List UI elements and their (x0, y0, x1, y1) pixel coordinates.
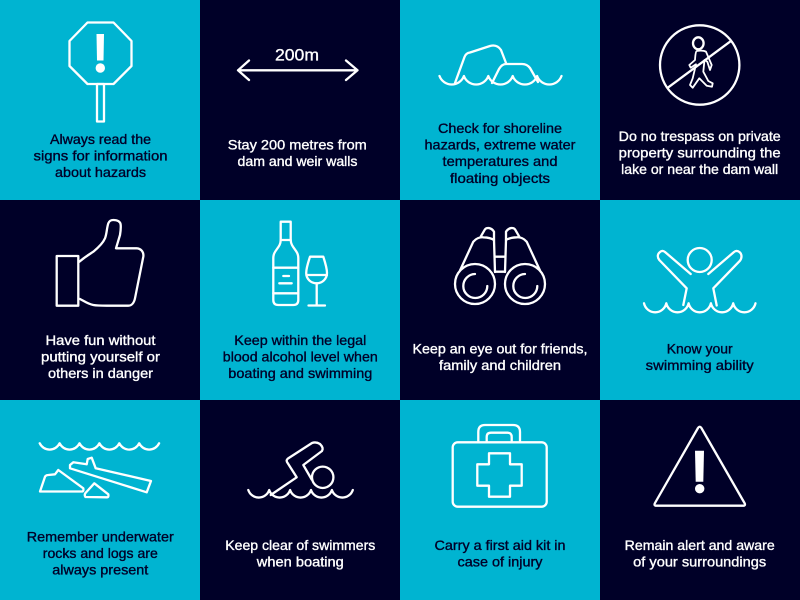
panel: blood alcohol (200, 200, 400, 400)
text: no trespassing: property surrounding the (619, 144, 781, 160)
text: swimming ability: swimming ability (646, 357, 754, 373)
text: read the signs: Always read the (50, 131, 151, 147)
text: blood alcohol (223, 332, 378, 381)
text: underwater rocks and logs: rocks and logs are (43, 545, 158, 561)
panel: shoreline hazards (400, 0, 600, 200)
text: keep an eye out: Keep an eye out for friends, (412, 340, 588, 356)
text: first aid kit: Carry a first aid kit in (434, 537, 566, 553)
panel: stay 200 metres (200, 0, 400, 200)
text: keep clear of swimmers: when boating (256, 554, 344, 570)
text: blood alcohol: Keep within the legal (234, 332, 366, 348)
text: have fun: Have fun without (46, 332, 156, 348)
icon: 200m double arrow: 200m (275, 46, 319, 64)
text: no trespassing: lake or near the dam wall (621, 161, 778, 177)
text: swimming ability: Know your (667, 340, 733, 356)
text: keep an eye out: family and children (439, 357, 561, 373)
icon: first aid case (453, 425, 547, 507)
icon: thumbs up (57, 220, 143, 306)
text: remain alert: of your surroundings (633, 554, 766, 570)
panel: underwater rocks and logs (0, 400, 200, 600)
icon: wine bottle and glass (273, 222, 327, 306)
icon: swimmer (248, 442, 353, 498)
text: first aid kit (434, 537, 566, 570)
text: shoreline hazards: hazards, extreme water (424, 136, 576, 152)
text: no trespassing: Do no trespass on private (619, 128, 781, 144)
text: underwater rocks and logs (27, 528, 174, 578)
text: shoreline hazards: temperatures and (442, 153, 558, 169)
text: swimming ability (646, 340, 754, 373)
text: shoreline hazards: floating objects (450, 170, 550, 186)
text: shoreline hazards: Check for shoreline (438, 120, 562, 136)
text: keep clear of swimmers (225, 537, 375, 570)
panel: read the signs (0, 0, 200, 200)
text: read the signs (34, 131, 168, 180)
text: keep clear of swimmers: Keep clear of swimmers (225, 537, 375, 553)
text: stay 200 metres (228, 136, 367, 169)
text: read the signs: signs for information (34, 148, 168, 164)
panel: keep clear of swimmers (200, 400, 400, 600)
text: read the signs: about hazards (55, 164, 146, 180)
text: shoreline hazards (424, 120, 576, 186)
icon: octagonal warning sign (70, 22, 132, 122)
icon: warning triangle (654, 427, 745, 506)
text: have fun: putting yourself or (41, 348, 160, 364)
text: first aid kit: case of injury (458, 554, 542, 570)
panel: remain alert (600, 400, 800, 600)
icon: person waving in water (644, 248, 755, 312)
text: remain alert (625, 537, 775, 570)
text: stay 200 metres: dam and weir walls (238, 153, 358, 169)
text: underwater rocks and logs: always present (52, 562, 148, 578)
icon: no walking sign (660, 25, 739, 105)
panel: first aid kit (400, 400, 600, 600)
text: keep an eye out (412, 340, 588, 373)
text: have fun (41, 332, 160, 381)
icon: 200m double arrow (238, 46, 358, 80)
text: blood alcohol: blood alcohol level when (223, 348, 378, 364)
icon: binoculars (455, 228, 545, 304)
icon: submerged rocks and log (40, 443, 159, 497)
panel: keep an eye out (400, 200, 600, 400)
panel: no trespassing (600, 0, 800, 200)
panel: swimming ability (600, 200, 800, 400)
text: no trespassing (619, 128, 781, 177)
text: remain alert: Remain alert and aware (625, 537, 775, 553)
icon: rocks in water (440, 46, 562, 85)
panel: have fun (0, 200, 200, 400)
text: blood alcohol: boating and swimming (228, 365, 372, 381)
text: underwater rocks and logs: Remember underwater (27, 528, 174, 544)
text: stay 200 metres: Stay 200 metres from (228, 136, 367, 152)
text: have fun: others in danger (48, 365, 153, 381)
